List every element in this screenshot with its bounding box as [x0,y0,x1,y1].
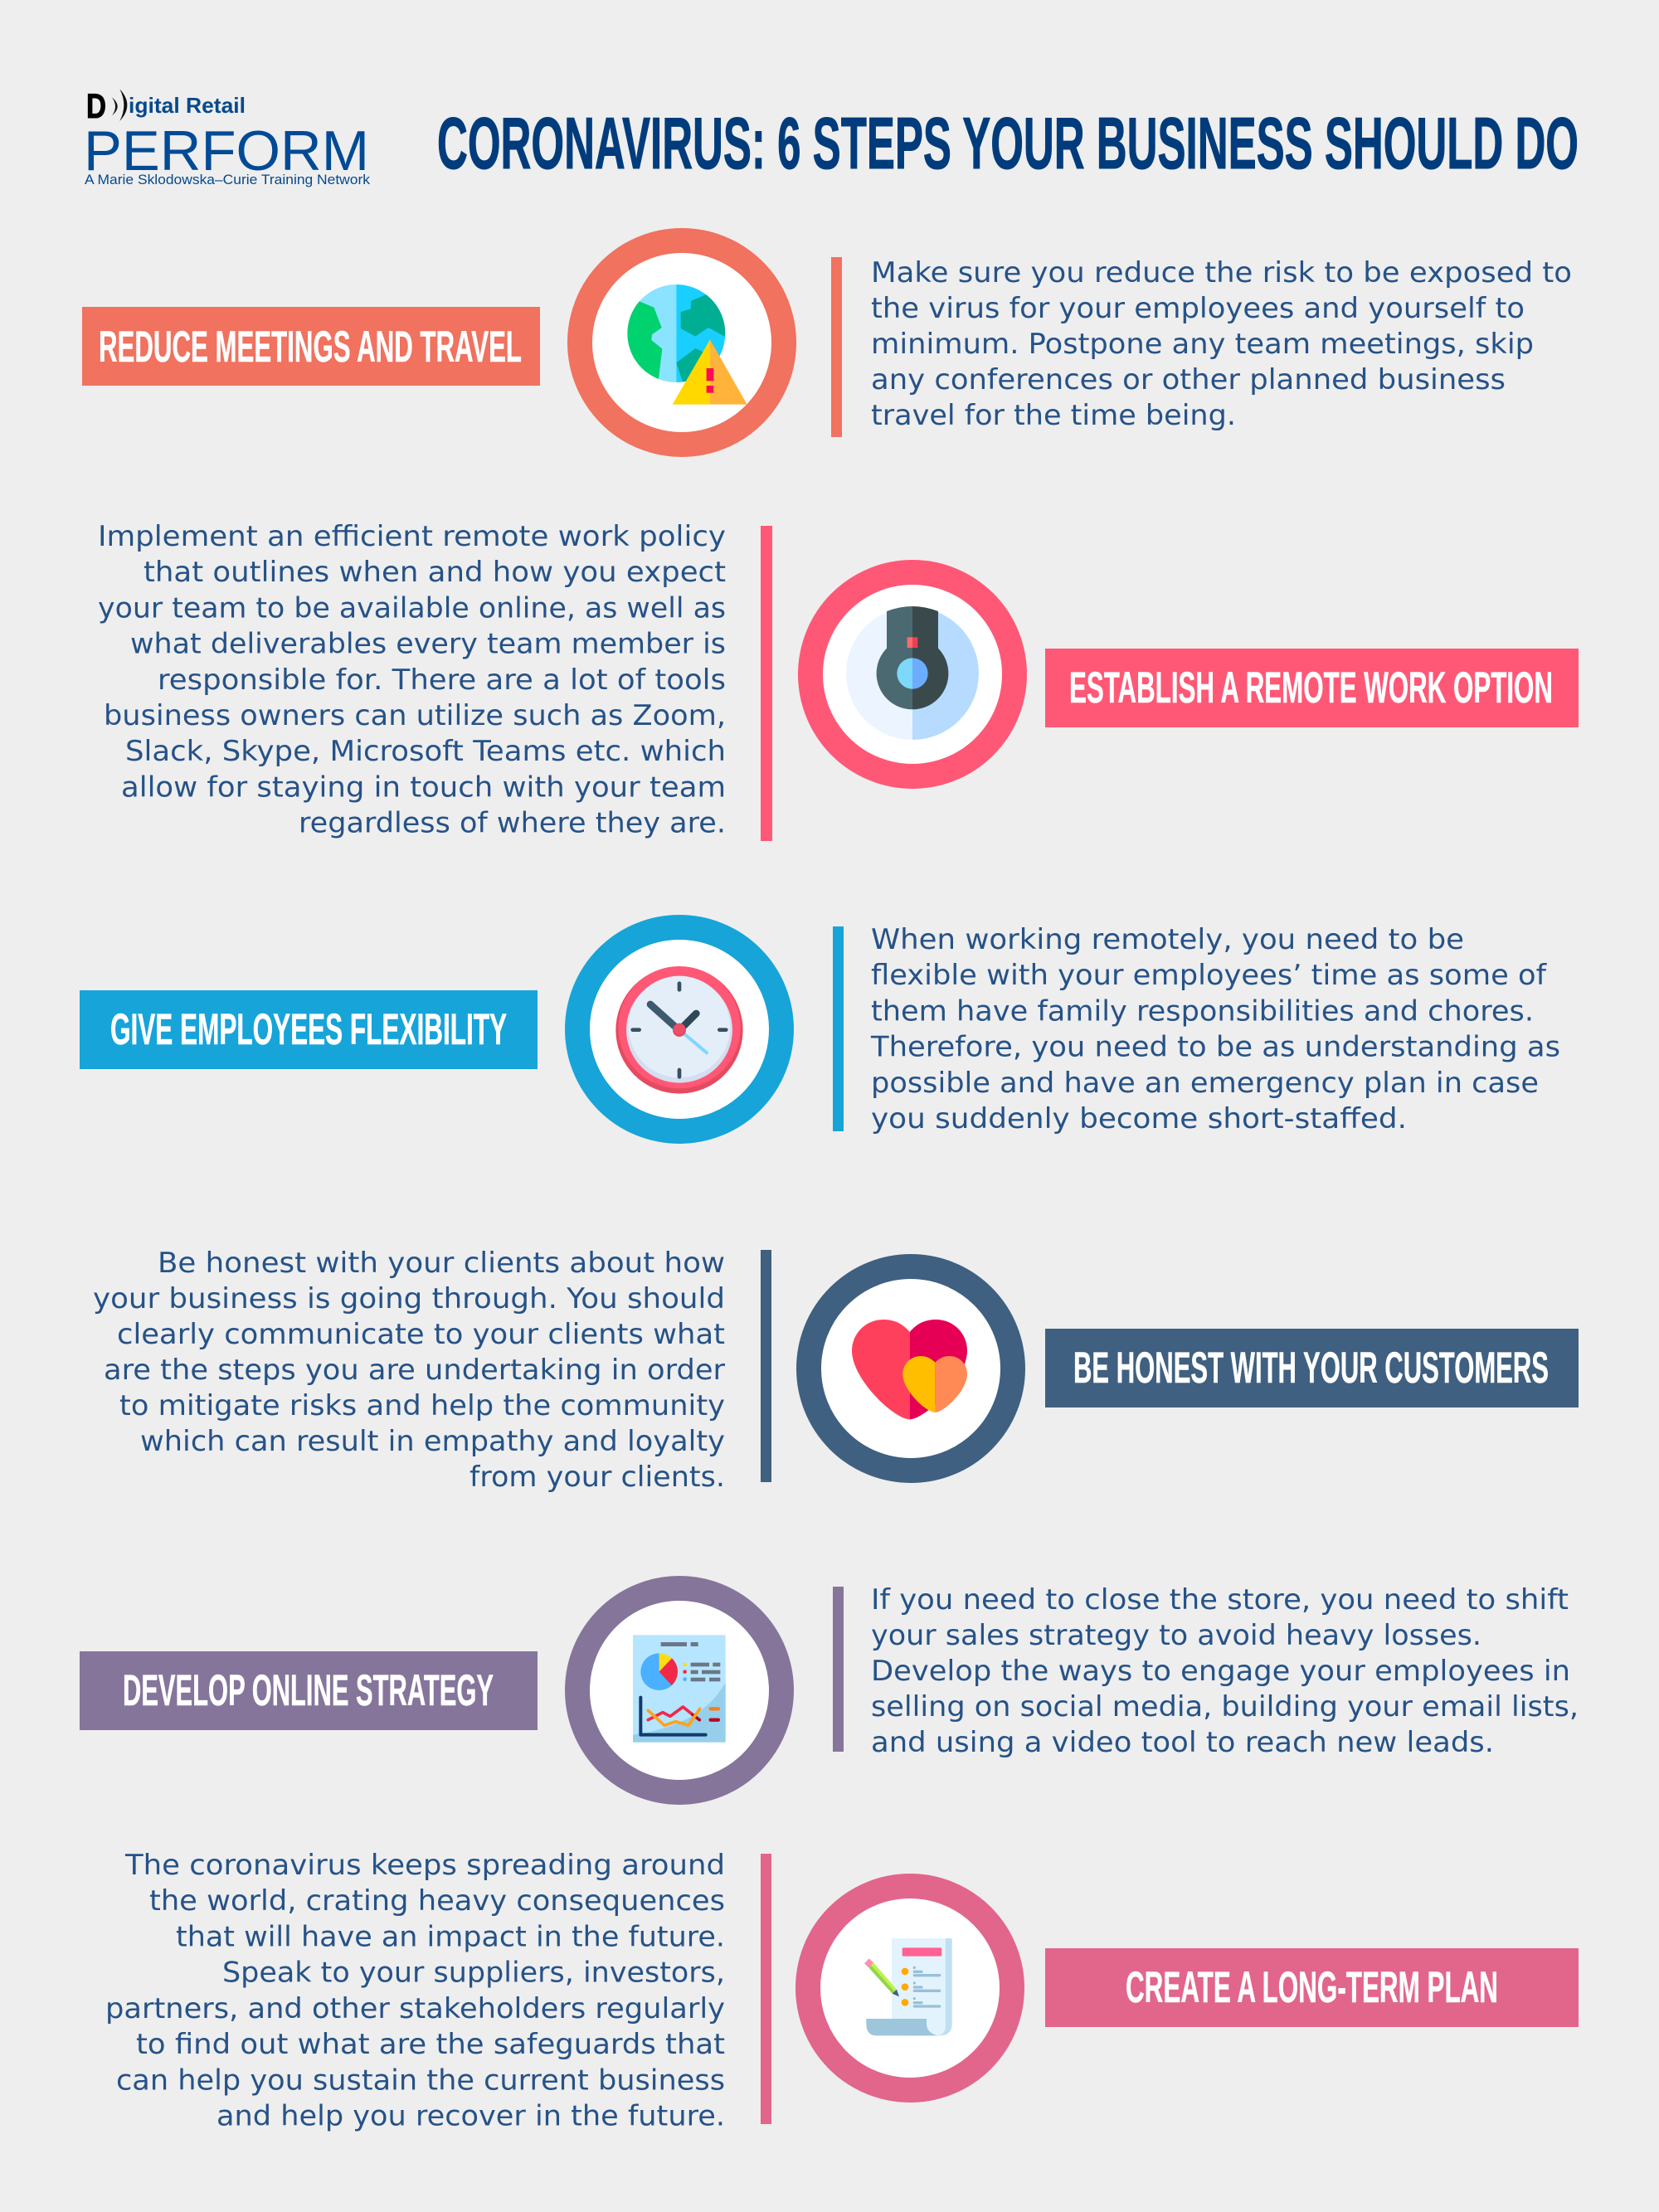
logo: Digital Retail Perform: igital Retail [129,93,246,118]
text block: step 4: are the steps you are undertaking in order [104,1354,725,1387]
text block: step 3: When working remotely, you need to be [871,923,1464,956]
text block: step 3 [870,923,1560,1135]
text block: step 6: the world, crating heavy consequences [149,1884,725,1918]
accent bar [833,926,844,1131]
text block: step 2: what deliverables every team member is [130,628,726,661]
logo: Digital Retail Perform: D [86,86,106,125]
text block: step 4: to mitigate risks and help the community [119,1389,725,1422]
text block: step 2: Implement an efficient remote work policy [98,520,726,553]
panel: step 3 give employees flexibility [80,923,1560,1135]
text block: step 3: them have family responsibilities and chores. [871,994,1534,1028]
text block: step 2 [98,520,726,840]
text block: step 5: selling on social media, building your email lists, [871,1690,1579,1723]
accent bar [761,526,772,841]
heading: give employees flexibility: GIVE EMPLOYEES FLEXIBILITY [110,1005,507,1054]
text block: step 4: clearly communicate to your clients what [117,1318,725,1351]
heading: create a long-term plan [1045,1948,1579,2027]
text block: step 6: to find out what are the safeguards that [136,2028,725,2061]
accent bar [833,1587,844,1752]
logo: Digital Retail Perform: A Marie Sklodowska–Curie Training Network [85,173,371,187]
heading: reduce meetings and travel: REDUCE MEETINGS AND TRAVEL [99,323,522,372]
text block: step 6: Speak to your suppliers, investors, [222,1957,725,1990]
logo: Digital Retail Perform: PERFORM [84,119,369,182]
text block: step 5: If you need to close the store, you need to shift [871,1583,1569,1616]
logo: Digital Retail Perform [84,86,371,187]
text block: step 5 [871,1583,1579,1759]
text block: step 4 [93,1247,725,1494]
accent bar [761,1250,771,1482]
icon: hearts [809,1266,1013,1471]
heading: reduce meetings and travel [82,307,540,386]
icon: globe with warning triangle [580,241,784,445]
panel: step 4 be honest with your customers [93,1247,1579,1494]
text block: step 3: Therefore, you need to be as understanding as [870,1031,1560,1064]
text block: step 3: you suddenly become short-staffed. [871,1102,1407,1135]
panel: step 6 create a long-term plan [105,1849,1579,2133]
text block: step 1: the virus for your employees and yourself to [871,292,1525,325]
text block: step 5: your sales strategy to avoid heavy losses. [871,1619,1481,1652]
icon: clock [577,927,781,1131]
text block: step 1: travel for the time being. [871,399,1236,432]
text block: step 4: which can result in empathy and loyalty [140,1425,725,1458]
heading: be honest with your customers [1045,1329,1579,1407]
text block: step 2: Slack, Skype, Microsoft Teams etc. which [125,735,726,768]
panel: step 2 establish a remote work option [98,520,1579,841]
text block: step 5: Develop the ways to engage your employees in [871,1655,1570,1688]
icon: webcam [810,572,1014,776]
heading: develop online strategy [80,1651,538,1730]
text block: step 1: Make sure you reduce the risk to be exposed to [871,256,1572,289]
text block: step 2: that outlines when and how you expect [144,556,726,589]
text block: step 2: business owners can utilize such as Zoom, [104,699,726,732]
icon: report with charts [577,1588,781,1792]
accent bar [761,1854,771,2124]
text block: step 2: regardless of where they are. [299,807,726,840]
text block: step 5: and using a video tool to reach new leads. [871,1726,1494,1759]
panel: step 1 reduce meetings and travel [82,241,1572,445]
text block: step 1 [871,256,1572,432]
text block: step 6: The coronavirus keeps spreading around [124,1849,725,1882]
text block: step 4: Be honest with your clients about how [158,1247,725,1280]
text block: step 2: your team to be available online, as well as [98,591,726,625]
text block: step 6 [105,1849,725,2133]
text block: step 1: any conferences or other planned business [871,363,1506,396]
text block: step 1: minimum. Postpone any team meetings, skip [871,328,1534,361]
text block: step 2: allow for staying in touch with your team [121,771,726,804]
text block: step 6: partners, and other stakeholders regularly [105,1992,725,2025]
text block: step 6: can help you sustain the current business [116,2064,725,2097]
text block: step 3: flexible with your employees’ time as some of [871,959,1547,992]
heading: develop online strategy: DEVELOP ONLINE STRATEGY [123,1666,494,1715]
icon: checklist document with pencil [808,1886,1012,2090]
panel: step 5 develop online strategy [80,1583,1579,1792]
text block: step 6: and help you recover in the future. [216,2100,725,2133]
heading: give employees flexibility [80,990,538,1069]
text block: step 4: from your clients. [469,1461,725,1494]
text block: step 2: responsible for. There are a lot of tools [158,664,726,697]
text block: step 6: that will have an impact in the future. [176,1921,725,1954]
accent bar [831,257,842,437]
text block: step 4: your business is going through. You should [93,1282,725,1315]
text block: step 3: possible and have an emergency plan in case [871,1067,1539,1100]
heading: establish a remote work option [1045,649,1579,727]
